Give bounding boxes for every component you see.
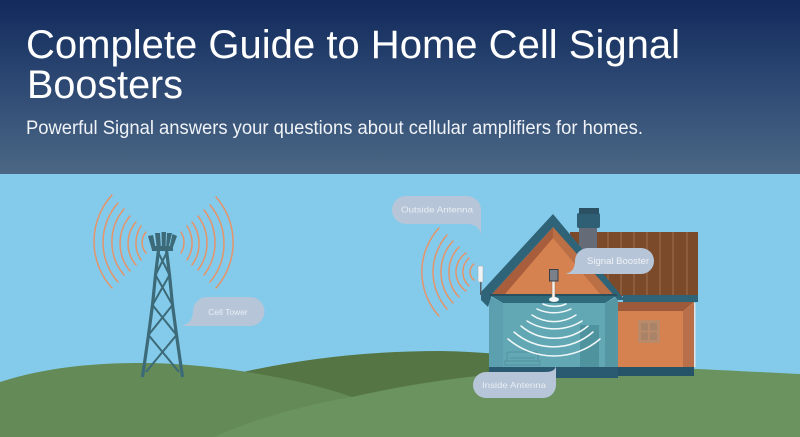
title xyxy=(26,23,680,107)
title: Boosters xyxy=(27,63,183,107)
callout: cell tower xyxy=(180,297,264,326)
callout: cell tower: Cell Tower xyxy=(208,307,248,317)
tower antennas xyxy=(148,232,177,251)
title: Complete Guide to Home Cell Signal xyxy=(26,23,680,67)
cell tower xyxy=(94,195,233,377)
callout: outside antenna xyxy=(392,196,481,235)
hill: left xyxy=(0,363,420,437)
panel: sky background xyxy=(0,174,800,437)
right wing window xyxy=(638,320,660,343)
tower signal waves right xyxy=(181,197,233,288)
outside antenna xyxy=(478,266,483,295)
sofa xyxy=(505,352,540,365)
door xyxy=(580,325,599,367)
callout: signal booster xyxy=(565,248,654,274)
hill: back dark xyxy=(230,351,620,437)
callout: inside antenna xyxy=(473,365,556,398)
main room xyxy=(489,295,618,378)
callout: signal booster: Signal Booster xyxy=(587,256,649,266)
hill: front right xyxy=(214,368,800,437)
house xyxy=(478,208,698,378)
inside signal waves xyxy=(508,304,600,356)
right wing wall xyxy=(617,295,698,376)
hills xyxy=(0,351,800,437)
gable roof xyxy=(481,214,625,307)
chimney xyxy=(577,208,600,252)
tower signal waves left xyxy=(94,195,146,288)
subtitle: Powerful Signal answers your questions about cellular amplifiers for homes. xyxy=(26,118,643,139)
callout: outside antenna: Outside Antenna xyxy=(401,204,473,214)
panel: header band xyxy=(0,0,800,174)
signal booster device xyxy=(549,270,559,302)
right wing brown roof xyxy=(570,232,698,296)
outside antenna signal waves xyxy=(422,228,474,316)
tower structure xyxy=(142,250,182,377)
callout: inside antenna: Inside Antenna xyxy=(482,380,546,390)
